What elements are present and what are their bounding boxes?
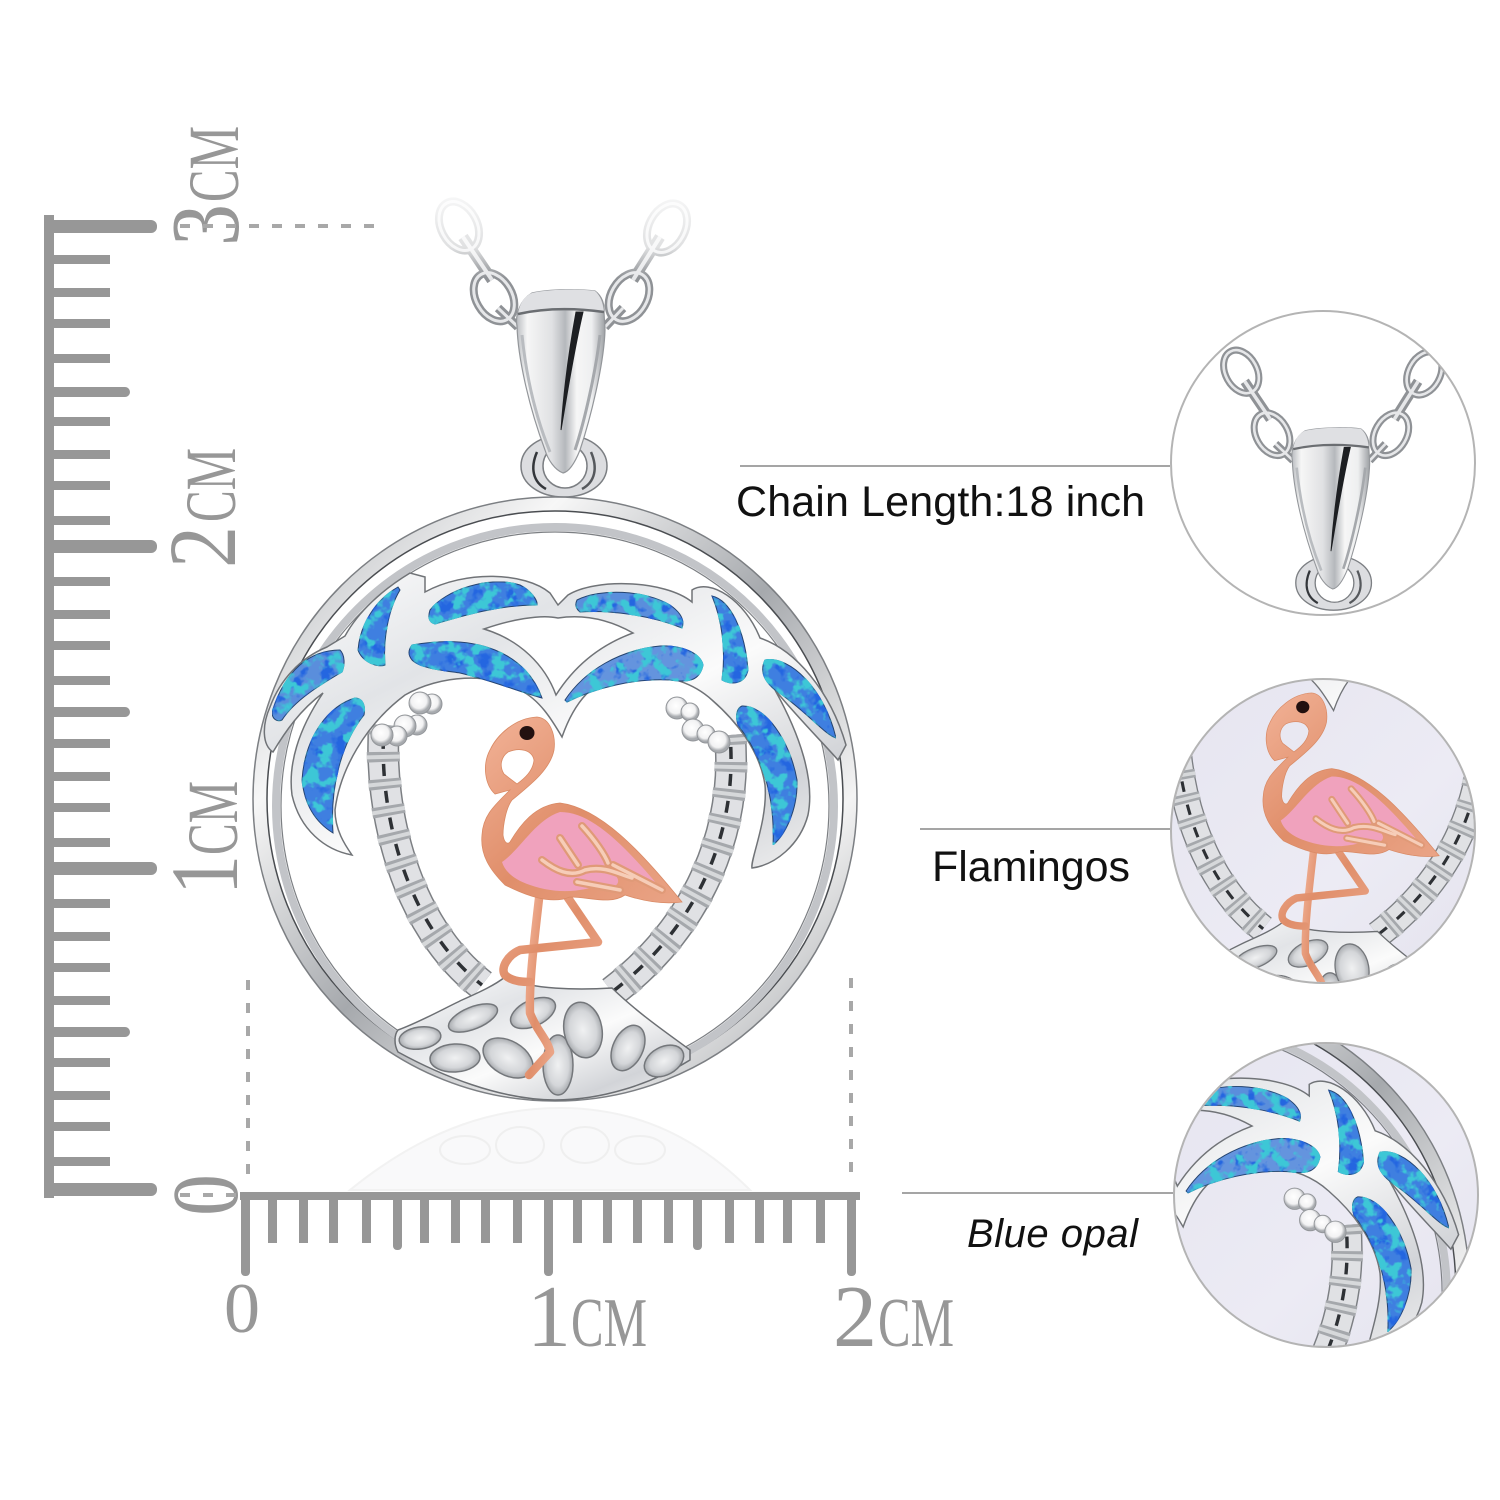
vertical ruler labels: CM bbox=[173, 781, 253, 855]
bail bbox=[517, 290, 605, 473]
label: Flamingos bbox=[932, 843, 1130, 891]
chain links bbox=[431, 195, 695, 329]
flamingo bbox=[482, 717, 682, 1075]
jump ring bbox=[521, 435, 607, 497]
vertical ruler labels: CM bbox=[171, 448, 251, 522]
vertical ruler labels: 0 bbox=[154, 1174, 258, 1216]
flamingo legs bbox=[503, 890, 598, 1075]
horizontal ruler bbox=[240, 1192, 860, 1276]
pebble base bbox=[395, 977, 690, 1100]
leader line bbox=[740, 465, 1170, 467]
horizontal ruler labels: CM bbox=[878, 1285, 954, 1362]
label: Chain Length:18 inch bbox=[736, 478, 1145, 526]
vertical ruler bbox=[44, 215, 157, 1198]
horizontal ruler labels: CM bbox=[571, 1285, 647, 1362]
horizontal ruler labels: 0 bbox=[224, 1270, 260, 1348]
leader line bbox=[920, 828, 1170, 830]
chain and bail bbox=[431, 195, 695, 497]
pendant ring bbox=[253, 497, 857, 1101]
circle: chain detail bbox=[1171, 311, 1475, 615]
pebbles bbox=[398, 991, 689, 1095]
vertical ruler labels: 3 bbox=[152, 204, 260, 246]
vertical ruler labels: CM bbox=[174, 126, 254, 202]
horizontal ruler labels: 1 bbox=[527, 1269, 571, 1366]
vertical ruler labels bbox=[149, 126, 260, 1216]
horizontal ruler labels: 2 bbox=[833, 1269, 877, 1366]
vertical ruler labels: 2 bbox=[149, 526, 256, 568]
flamingo silhouette bbox=[482, 717, 682, 903]
leader line bbox=[902, 1192, 1173, 1194]
dashed guide lines bbox=[180, 226, 851, 1195]
blue opal inlays bbox=[272, 582, 836, 845]
pendant bbox=[253, 497, 857, 1101]
circle: blue opal detail bbox=[1173, 1042, 1479, 1348]
flamingo eye bbox=[520, 726, 534, 740]
coconuts bbox=[371, 692, 730, 753]
vertical ruler labels: 1 bbox=[151, 855, 258, 895]
palm trunks bbox=[383, 725, 731, 992]
circle: flamingo detail bbox=[1170, 678, 1476, 984]
palm fronds silver bbox=[264, 573, 846, 868]
label: Blue opal bbox=[967, 1212, 1139, 1256]
necklace reflection bbox=[350, 1108, 750, 1190]
horizontal ruler labels bbox=[224, 1269, 954, 1366]
chain fade bbox=[425, 190, 705, 278]
flamingo pink wing bbox=[502, 812, 662, 891]
flamingo wing veins bbox=[542, 826, 662, 890]
